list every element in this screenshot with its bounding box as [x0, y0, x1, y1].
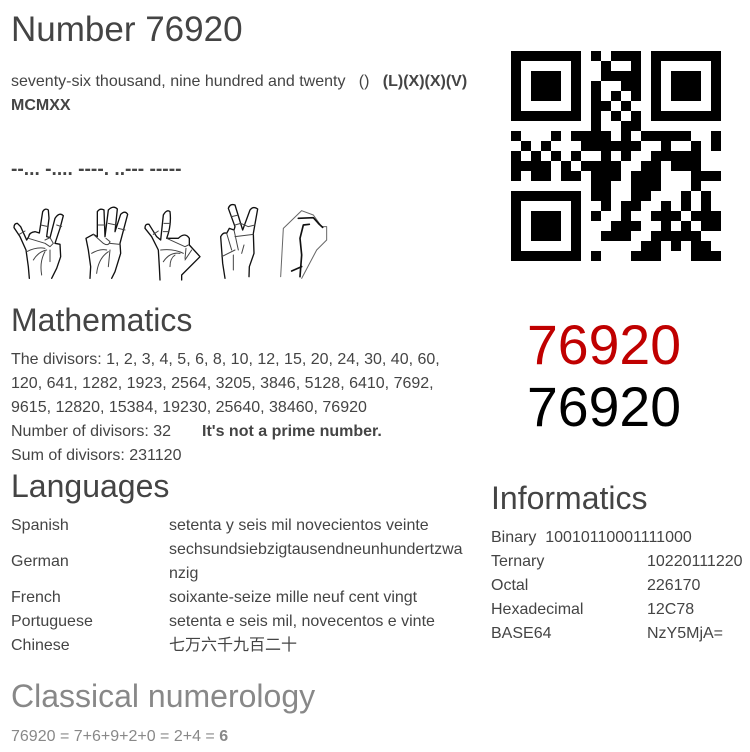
- row: hexadecimal: [491, 601, 694, 618]
- row: German: [11, 541, 463, 582]
- informatics table: [491, 529, 743, 642]
- icon: hand digit 7: [14, 209, 63, 278]
- row: Spanish: Spanish: [11, 517, 69, 534]
- icon: hand digit 0: [281, 211, 327, 278]
- row: binary: Binary 10010110001111000: [491, 529, 692, 546]
- icon: hand digit 9: [145, 211, 200, 280]
- numerology calculation: 76920 = 7+6+9+2+0 = 2+4 = 6: [11, 728, 228, 745]
- row: octal: Octal: [491, 577, 528, 594]
- row: Portuguese: setenta e seis mil, novecentos e vinte: [169, 613, 435, 630]
- number in words and Roman numerals: seventy-six thousand, nine hundred and twenty () (L)(X)(X)(V): [11, 73, 467, 90]
- sum of divisors: Sum of divisors: 231120: [11, 447, 181, 464]
- row: French: [11, 589, 417, 606]
- icon: hand digit 6: [86, 207, 128, 278]
- row: hexadecimal: Hexadecimal: [491, 601, 583, 618]
- row: Portuguese: [11, 613, 435, 630]
- row: German: German: [11, 553, 69, 570]
- prime status: It's not a prime number.: [202, 423, 382, 440]
- informatics table: 10220111220: [647, 553, 743, 570]
- icon: hand digit 2: [221, 205, 258, 278]
- row: base64: BASE64: [491, 625, 551, 642]
- informatics table: 226170: [647, 577, 700, 594]
- informatics table: NzY5MjA=: [647, 625, 723, 642]
- row: octal: [491, 577, 700, 594]
- informatics table: 12C78: [647, 601, 694, 618]
- languages table: [11, 517, 463, 654]
- divisors list: [11, 351, 440, 416]
- row: Spanish: [11, 517, 429, 534]
- divisors list: 9615, 12820, 15384, 19230, 25640, 38460, 76920: [11, 399, 367, 416]
- number in words and Roman numerals: MCMXX: [11, 97, 71, 114]
- morse code: --... -.... ----. ..--- -----: [11, 159, 181, 180]
- row: French: soixante-seize mille neuf cent vingt: [169, 589, 417, 606]
- heading: languages: Languages: [11, 468, 169, 504]
- row: ternary: [491, 553, 743, 570]
- divisors list: The divisors: 1, 2, 3, 4, 5, 6, 8, 10, 12, 15, 20, 24, 30, 40, 60,: [11, 351, 440, 368]
- row: Chinese: Chinese: [11, 637, 70, 654]
- number in words and Roman numerals: [11, 73, 467, 114]
- large red number: 76920: [527, 314, 681, 376]
- heading: informatics: Informatics: [491, 480, 647, 516]
- row: ternary: Ternary: [491, 553, 544, 570]
- title: Number 76920: [11, 10, 243, 49]
- row: Chinese: [11, 636, 297, 654]
- number of divisors: Number of divisors: 32: [11, 423, 171, 440]
- heading: classical numerology: Classical numerology: [11, 678, 315, 714]
- row: Chinese: 七万六千九百二十: [169, 637, 297, 654]
- row: German: sechsundsiebzigtausendneunhundertzwa: [169, 541, 463, 558]
- row: French: French: [11, 589, 61, 606]
- row: German: nzig: [169, 565, 198, 582]
- QR code: [511, 51, 721, 261]
- sign language hands: [13, 204, 328, 281]
- large black number: 76920: [527, 376, 681, 438]
- row: base64: [491, 625, 723, 642]
- row: Spanish: setenta y seis mil novecientos veinte: [169, 517, 429, 534]
- divisors list: 120, 641, 1282, 1923, 2564, 3205, 3846, 5128, 6410, 7692,: [11, 375, 434, 392]
- heading: mathematics: Mathematics: [11, 302, 192, 338]
- row: Portuguese: Portuguese: [11, 613, 93, 630]
